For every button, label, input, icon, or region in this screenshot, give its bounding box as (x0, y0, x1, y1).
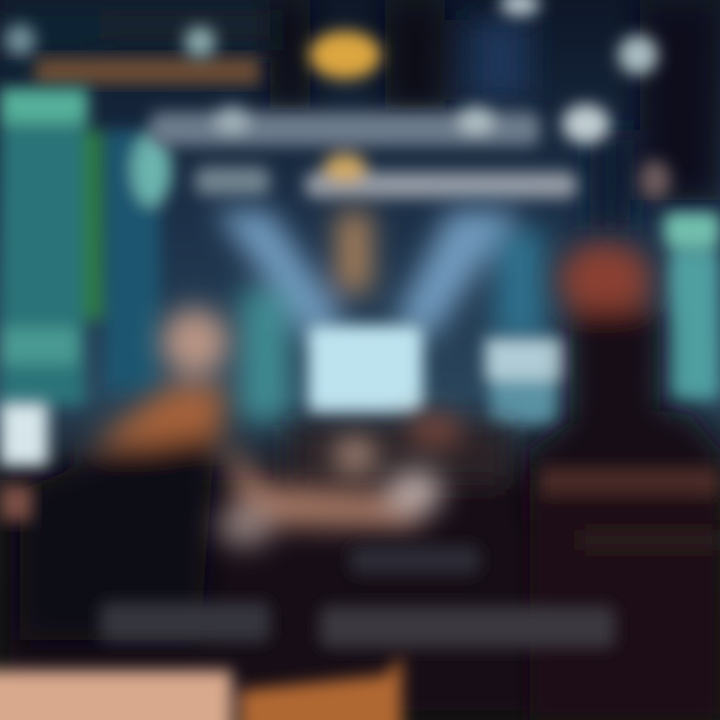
lower dark area (0, 425, 720, 720)
ceiling lamps (4, 0, 671, 200)
right person (530, 242, 720, 520)
left laptop (0, 402, 48, 466)
bottom table surfaces (0, 655, 402, 720)
left edge warm patch (0, 485, 32, 521)
ceiling and upper room (0, 0, 720, 230)
right teal panel (664, 212, 720, 400)
left teal panel (0, 88, 172, 405)
right bench (530, 467, 720, 720)
left person (20, 308, 229, 640)
blurred heading (150, 104, 610, 198)
blurred lower text bands (100, 545, 615, 648)
right screens (485, 338, 567, 425)
centre light beams (215, 210, 545, 420)
centre screen (308, 325, 423, 415)
ceiling beam (35, 58, 260, 84)
table and hands (217, 414, 463, 547)
